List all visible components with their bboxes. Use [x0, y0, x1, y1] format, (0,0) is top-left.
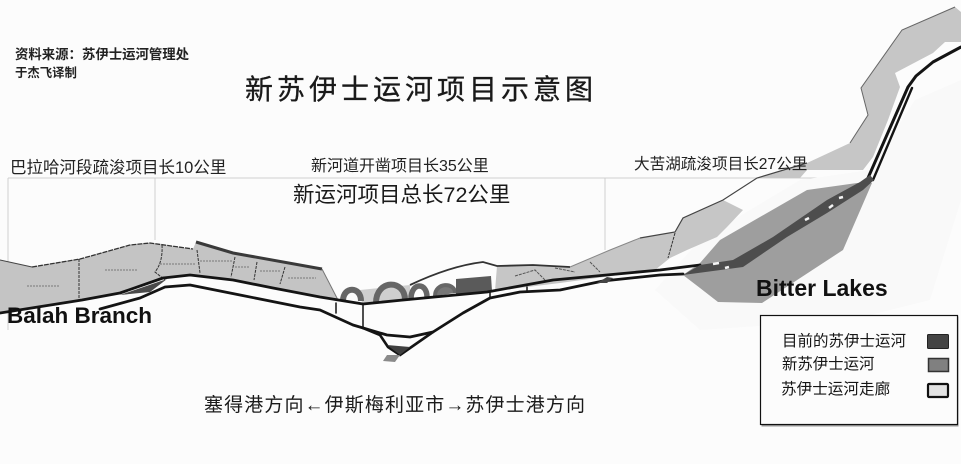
direction caption: 塞得港方向←伊斯梅利亚市→苏伊士港方向	[204, 394, 585, 416]
label: Balah Branch: Balah Branch	[7, 303, 152, 328]
label: total length: 新运河项目总长72公里	[293, 183, 510, 207]
label: Bitter Lakes: Bitter Lakes	[756, 275, 888, 301]
current canal lines	[0, 47, 961, 355]
source note	[15, 46, 190, 80]
label: Bitter Lakes section: 大苦湖疏浚项目长27公里	[634, 155, 807, 173]
label: new channel section: 新河道开凿项目长35公里	[311, 157, 489, 175]
source note: 于杰飞译制	[15, 65, 77, 80]
small junction near east	[597, 277, 613, 283]
legend: 目前的苏伊士运河	[782, 332, 906, 350]
source note: 资料来源：苏伊士运河管理处	[15, 46, 190, 62]
corridor: faint lake surroundings	[655, 80, 961, 330]
title: 新苏伊士运河项目示意图	[245, 74, 597, 105]
corridor: west bank land	[0, 242, 338, 313]
new canal dark block	[456, 276, 492, 295]
legend: 苏伊士运河走廊	[781, 380, 890, 398]
legend	[760, 316, 958, 426]
new canal side channels	[343, 285, 455, 303]
corridor: central land	[410, 238, 670, 291]
Balah bypass thick segment	[120, 279, 167, 295]
label: Balah section: 巴拉哈河段疏浚项目长10公里	[10, 158, 226, 177]
lake canal channel	[683, 175, 874, 275]
Bitter Lakes area	[683, 183, 872, 303]
corridor: light land behind new channels	[360, 285, 410, 303]
corridor: north-east bank land	[640, 7, 961, 268]
Ismailia junction triangle	[383, 345, 410, 362]
legend: 新苏伊士运河	[782, 355, 874, 373]
